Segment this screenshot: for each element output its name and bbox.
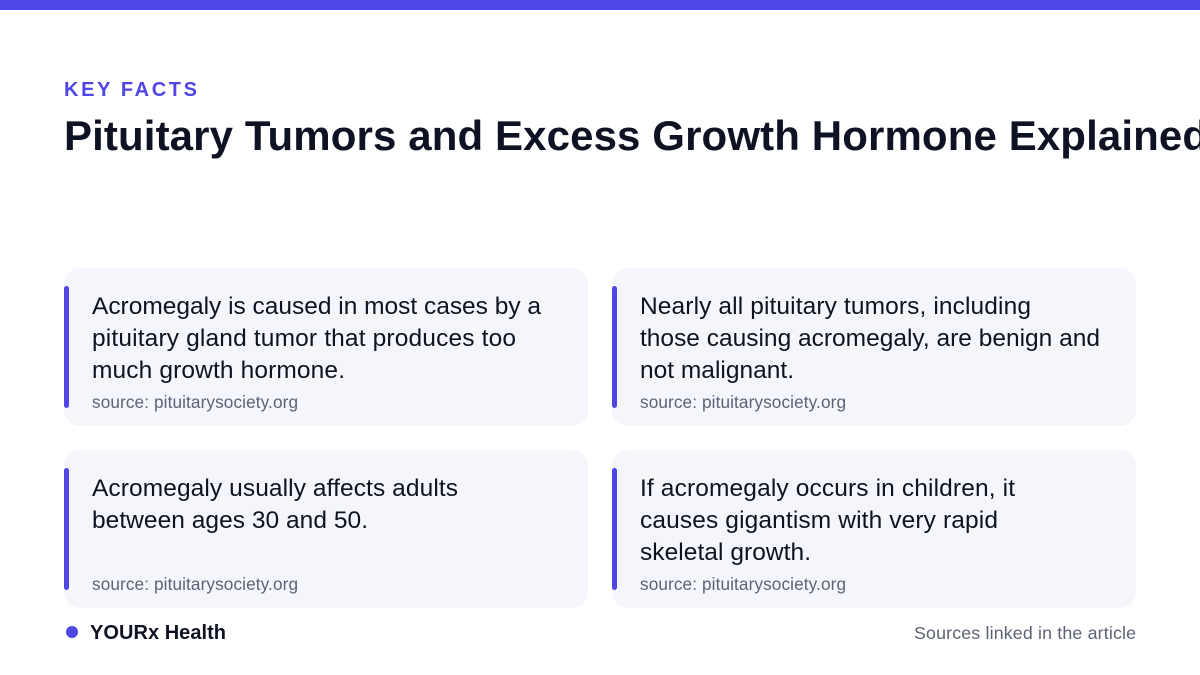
accent bar: fact 2 [612,286,617,408]
text: fact 1: much growth hormone. [92,357,345,384]
panel: fact 3 [64,450,588,608]
text: fact 1: pituitary gland tumor that produces too [92,325,516,352]
accent bar: fact 4 [612,468,617,590]
source: fact 3: source: pituitarysociety.org [92,574,298,594]
footer sources note: Sources linked in the article [914,623,1136,643]
text: fact 2 [640,293,1100,384]
brand name: YOURx Health [90,622,226,644]
title: Pituitary Tumors and Excess Growth Hormone Explained [64,112,1200,159]
text: fact 3: Acromegaly usually affects adults [92,475,458,502]
text: fact 3 [92,475,458,534]
brand dot [66,626,78,638]
top accent bar [0,0,1200,10]
source: fact 1: source: pituitarysociety.org [92,392,298,412]
accent bar: fact 3 [64,468,69,590]
text: fact 2: not malignant. [640,357,794,384]
text: fact 3: between ages 30 and 50. [92,507,368,534]
text: fact 4: causes gigantism with very rapid [640,507,998,534]
text: fact 4: If acromegaly occurs in children, it [640,475,1015,502]
text: fact 1 [92,293,541,384]
text: fact 2: those causing acromegaly, are benign and [640,325,1100,352]
panel: fact 2 [612,268,1136,426]
text: fact 2: Nearly all pituitary tumors, including [640,293,1031,320]
accent bar: fact 1 [64,286,69,408]
eyebrow: key facts: KEY FACTS [64,79,197,101]
panel: fact 4 [612,450,1136,608]
text: fact 4: skeletal growth. [640,539,811,566]
text: fact 4 [640,475,1015,566]
text: fact 1: Acromegaly is caused in most cases by a [92,293,541,320]
source: fact 2: source: pituitarysociety.org [640,392,846,412]
source: fact 4: source: pituitarysociety.org [640,574,846,594]
panel: fact 1 [64,268,588,426]
